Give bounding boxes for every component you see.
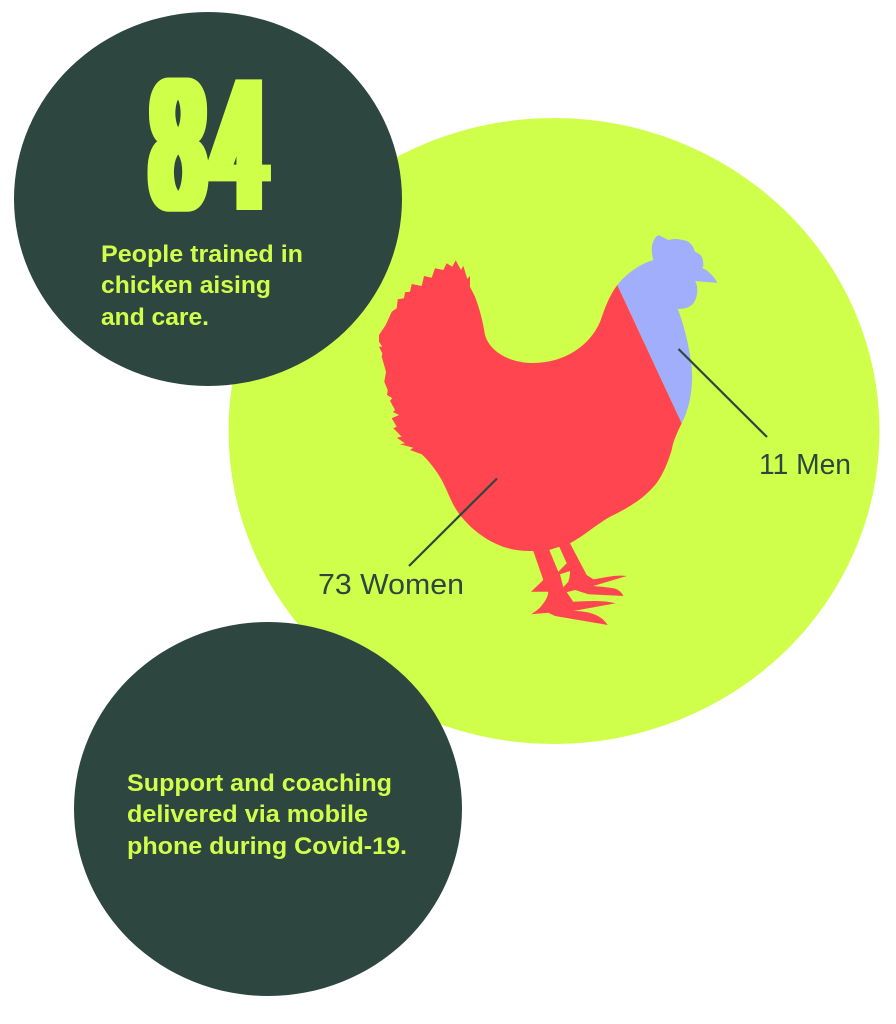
panel: people trained: [14, 12, 402, 386]
gaps between the legs: [549, 547, 570, 587]
leader line: men: [678, 349, 767, 437]
chart: chicken split by gender: [379, 235, 717, 625]
text: mobile coaching: Support and coaching: [127, 770, 392, 797]
text: mobile coaching: [127, 770, 407, 860]
leader line: women: [409, 478, 497, 566]
text: mobile coaching: delivered via mobile: [127, 801, 368, 828]
chicken body: women: [379, 260, 682, 625]
text: people trained: [101, 241, 303, 331]
text: mobile coaching: phone during Covid-19.: [127, 833, 407, 860]
label: women: 73 Women: [318, 569, 464, 601]
text: people trained: chicken aising: [101, 272, 271, 299]
panel: mobile coaching: [74, 622, 462, 996]
chicken head and neck: men: [617, 235, 717, 423]
panel: lime circle: [228, 118, 880, 744]
text: people trained: and care.: [101, 304, 209, 331]
label: men: 11 Men: [759, 449, 851, 481]
text: people trained: People trained in: [101, 241, 303, 268]
big number 84: 84: [152, 41, 265, 247]
